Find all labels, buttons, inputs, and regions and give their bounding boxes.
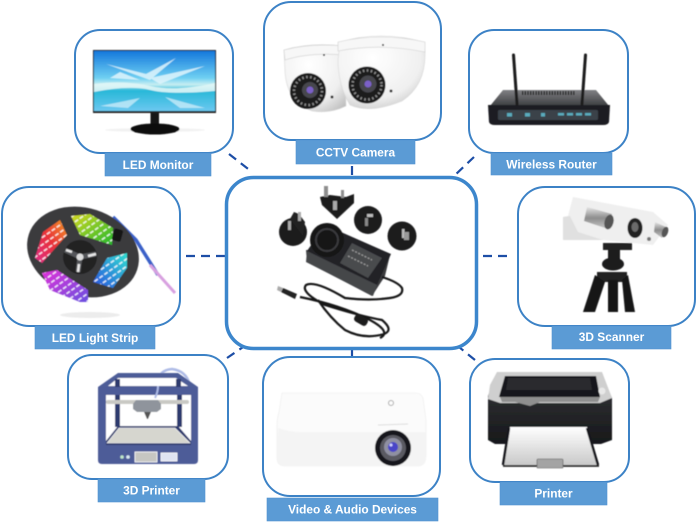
icon: LED reel bbox=[15, 193, 175, 318]
label bbox=[552, 326, 671, 349]
panel: Printer bbox=[470, 359, 629, 505]
label bbox=[35, 326, 155, 349]
label bbox=[105, 153, 211, 176]
label: 3D Printer bbox=[123, 484, 180, 498]
panel: 3D Printer bbox=[68, 355, 228, 502]
label: 3D Scanner bbox=[579, 330, 645, 344]
icon: projector bbox=[277, 393, 426, 466]
plug: middle bbox=[354, 206, 382, 234]
panel: 3D Scanner bbox=[518, 187, 695, 349]
label bbox=[296, 140, 415, 164]
label bbox=[98, 479, 205, 502]
label: LED Monitor bbox=[123, 158, 194, 172]
panel: Wireless Router bbox=[469, 30, 628, 175]
panel: CCTV Camera bbox=[264, 2, 441, 164]
panel: power adapter (centre) bbox=[226, 178, 476, 348]
panel: Video & Audio Devices bbox=[263, 357, 440, 521]
label: Printer bbox=[534, 486, 573, 500]
label bbox=[500, 482, 607, 505]
icon: router bbox=[488, 55, 610, 125]
plug: right bbox=[388, 222, 416, 250]
icon: adapter with plugs and cable bbox=[277, 186, 416, 338]
label: LED Light Strip bbox=[52, 331, 138, 345]
panel: LED Light Strip bbox=[2, 187, 180, 349]
connector: dashed lines to the centre bbox=[186, 154, 512, 360]
icon: dome cameras bbox=[284, 36, 425, 112]
plug: left bbox=[279, 212, 307, 246]
label bbox=[267, 498, 438, 521]
icon: monitor bbox=[93, 50, 216, 134]
label bbox=[491, 153, 612, 175]
icon: 3D printer bbox=[98, 369, 198, 464]
plug: UK bbox=[320, 186, 354, 219]
panel: LED Monitor bbox=[75, 30, 233, 176]
icon: laser printer bbox=[488, 372, 612, 468]
label: Video & Audio Devices bbox=[288, 502, 417, 516]
label: CCTV Camera bbox=[316, 146, 396, 160]
icon: 3D scanner on tripod bbox=[563, 197, 670, 312]
label: Wireless Router bbox=[506, 158, 597, 172]
